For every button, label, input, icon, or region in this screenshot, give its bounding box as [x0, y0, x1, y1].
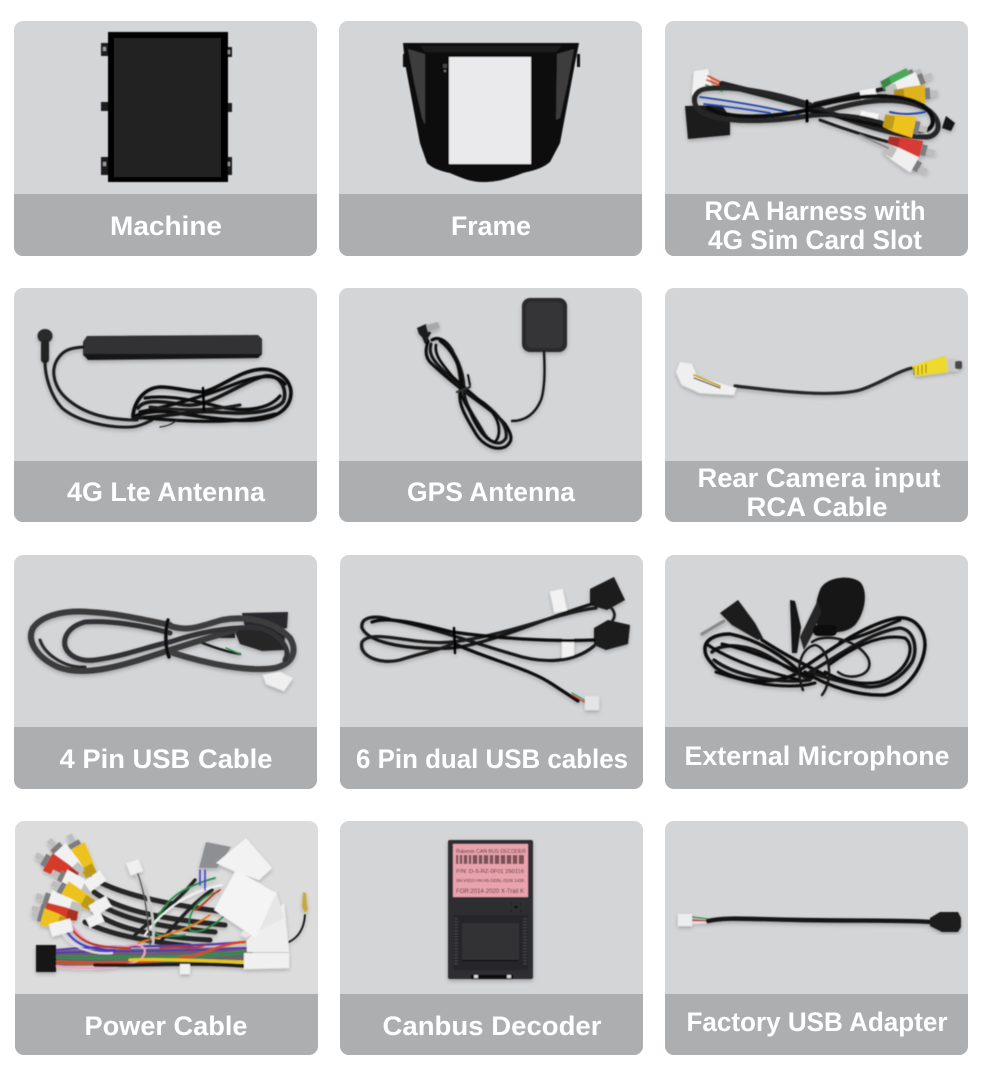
panel: Frame: [339, 21, 642, 256]
label bar: [339, 461, 642, 522]
label text: Canbus Decoder: [382, 1011, 602, 1041]
panel: RCA Harness: [665, 21, 968, 256]
label text: GPS Antenna: [407, 477, 576, 507]
card background: [340, 821, 643, 1055]
product image: rear camera cable: [676, 356, 962, 395]
panel: Power Cable: [15, 821, 318, 1055]
label bar: [14, 727, 317, 789]
panel: GPS Antenna: [339, 288, 642, 522]
panel: Factory USB Adapter: [665, 821, 968, 1055]
label text: RCA Harness with: [704, 196, 926, 226]
card background: [14, 288, 317, 522]
label text: Factory USB Adapter: [686, 1007, 948, 1037]
label text: 6 Pin dual USB cables: [356, 744, 628, 774]
product image: USB adapter: [678, 912, 961, 932]
label text: Machine: [110, 211, 222, 241]
card background: [14, 555, 317, 789]
label text: 4G Lte Antenna: [67, 477, 266, 507]
card background: [14, 21, 317, 256]
label text: [698, 463, 941, 522]
label bar: [340, 727, 643, 789]
label text: External Microphone: [684, 741, 950, 771]
product image: machine screen: [101, 32, 232, 182]
label bar: [665, 461, 968, 522]
panel: External Microphone: [665, 555, 968, 789]
product image: decoder box: [448, 840, 533, 979]
product image: GPS antenna: [417, 298, 567, 448]
card background: [665, 288, 968, 522]
card background: [15, 821, 318, 1055]
card background: [665, 821, 968, 1055]
sticker: FOR:2014-2020 X-Trail K: [456, 889, 524, 895]
sticker: P/N: D-S-RZ-0F01 250116: [456, 869, 524, 875]
label text: 4 Pin USB Cable: [60, 744, 272, 774]
sticker: SN:V0G3 HN:H5-GEBL-0105 1426: [456, 878, 525, 883]
panel: 4 Pin USB Cable: [14, 555, 317, 789]
label bar: [15, 994, 318, 1055]
label bar: [665, 994, 968, 1055]
label text: [704, 196, 926, 255]
card background: [339, 21, 642, 256]
label bar: [339, 194, 642, 256]
product image: 4 pin USB cable: [31, 612, 294, 691]
label bar: [665, 194, 968, 256]
product image: power harness: [30, 830, 308, 974]
product image: RCA harness: [685, 64, 955, 180]
card background: [665, 21, 968, 256]
panel: Machine: [14, 21, 317, 256]
product image: microphone: [702, 578, 925, 695]
label text: 4G Sim Card Slot: [708, 225, 922, 255]
sticker: [453, 844, 528, 897]
panel: Canbus Decoder: [340, 821, 643, 1055]
product image: dash frame: [403, 43, 580, 182]
label text: Power Cable: [84, 1011, 247, 1041]
card background: [665, 555, 968, 789]
label bar: [14, 461, 317, 522]
label bar: [665, 727, 968, 789]
sticker: Raiseon CAN BUS DECODER: [456, 849, 526, 855]
label bar: [340, 994, 643, 1055]
label text: Rear Camera input: [698, 463, 941, 493]
panel: 4G Lte Antenna: [14, 288, 317, 522]
panel: Rear Camera input RCA Cable: [665, 288, 968, 522]
card background: [340, 555, 643, 789]
card background: [339, 288, 642, 522]
product image: dual USB cable: [362, 577, 630, 710]
label text: RCA Cable: [746, 492, 888, 522]
product image: 4G antenna: [38, 329, 291, 427]
label bar: [14, 194, 317, 256]
panel: 6 Pin dual USB cables: [340, 555, 643, 789]
label text: Frame: [451, 211, 531, 241]
